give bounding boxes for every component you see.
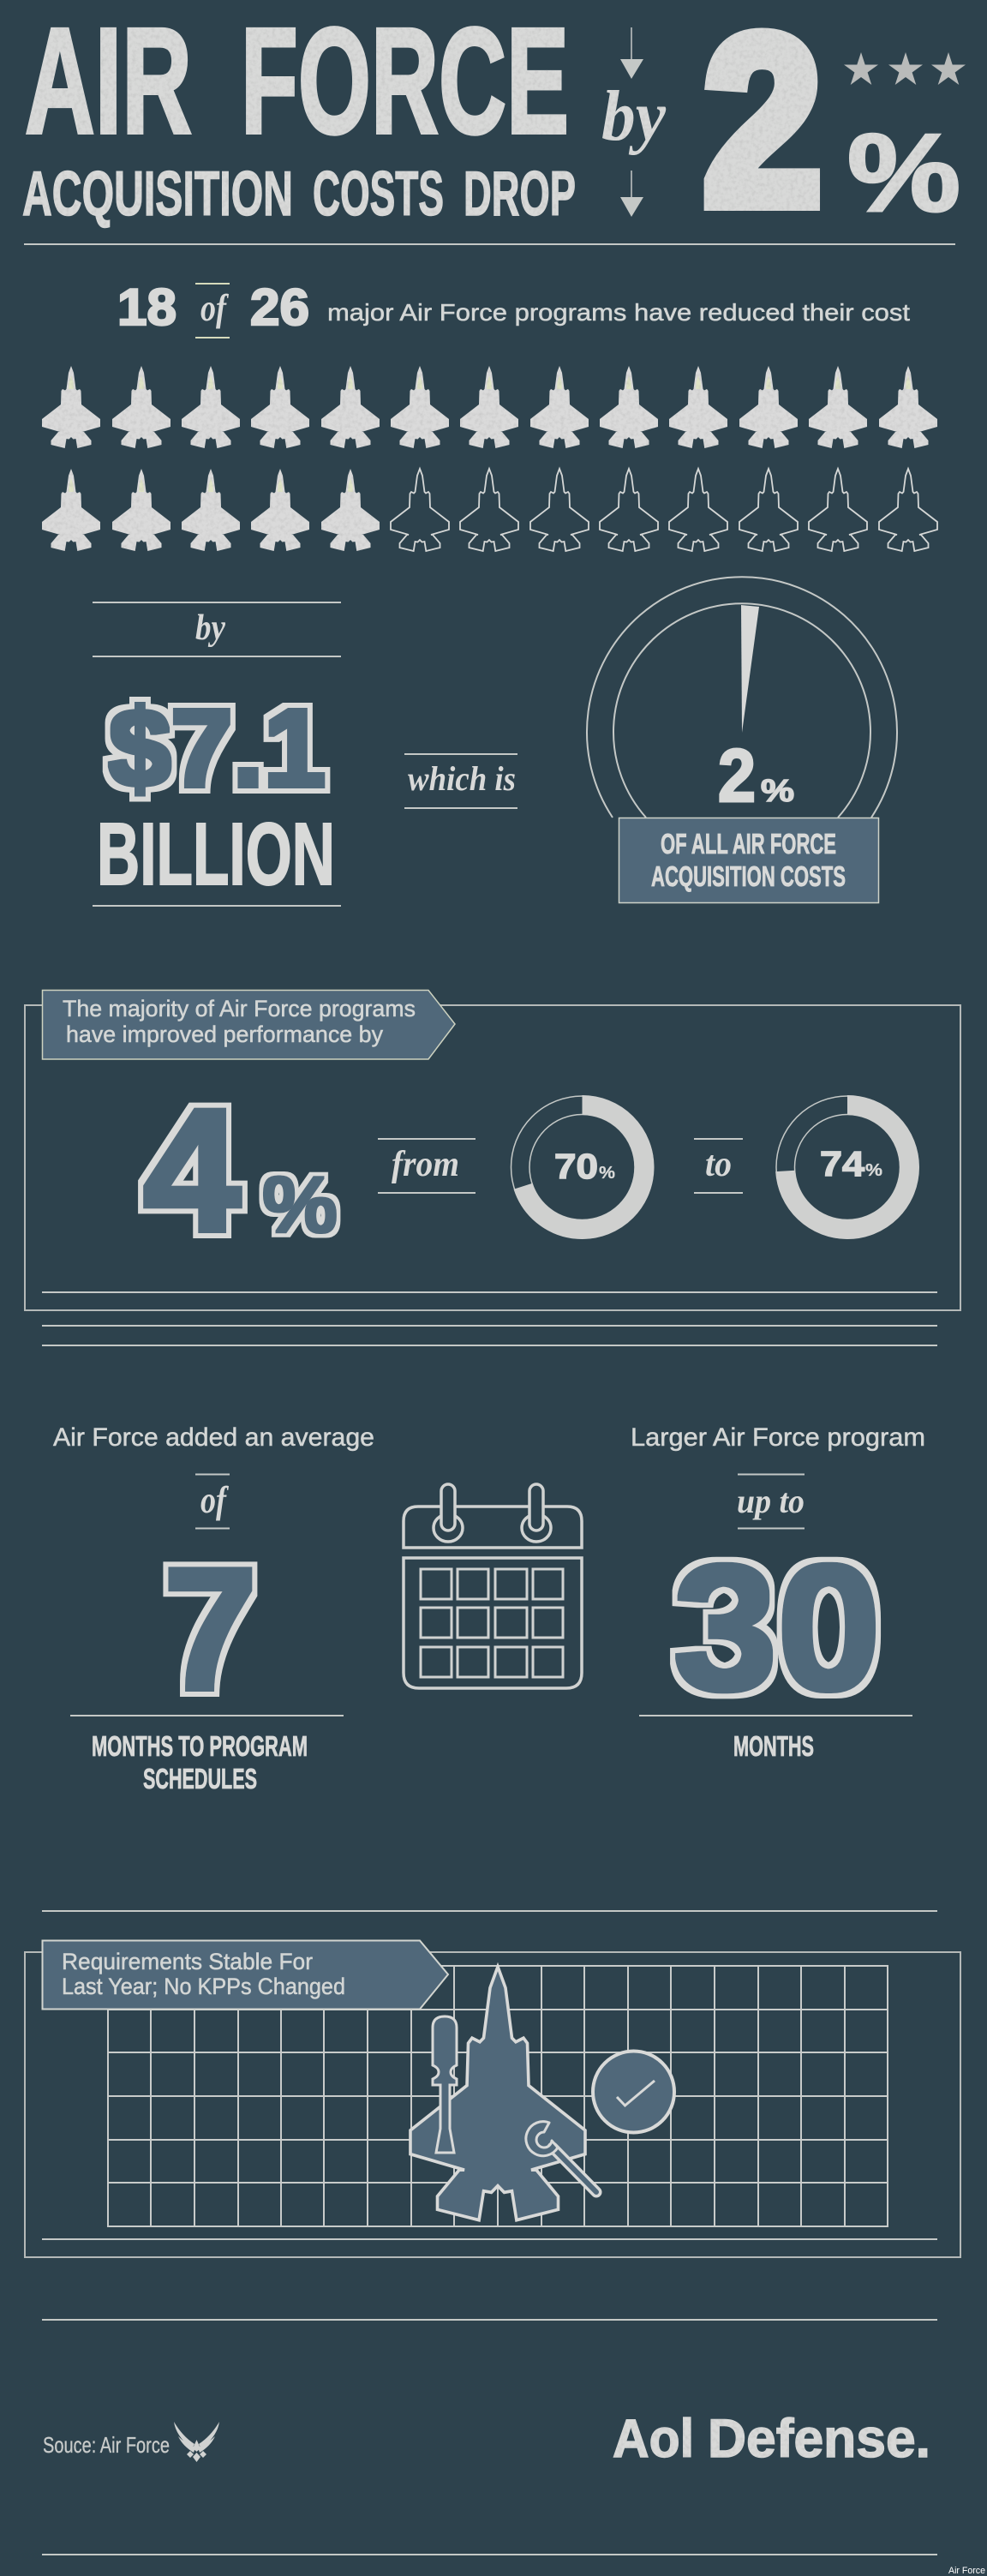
stat: by $7.1 billion	[93, 602, 341, 906]
text: which is	[404, 754, 517, 808]
donut: 74 percent	[776, 1096, 918, 1238]
headline: 18 of 26 programs: major Air Force programs have reduced their cost	[327, 299, 910, 326]
stat: 7: 7	[164, 1532, 257, 1727]
text: from: from	[392, 1145, 459, 1184]
donut: 70 percent	[511, 1096, 653, 1238]
text: source: Souce: Air Force	[43, 2432, 170, 2458]
icon: calendar	[404, 1484, 582, 1688]
title: %	[847, 111, 960, 235]
text: months to program schedules: SCHEDULES	[143, 1763, 257, 1794]
title	[22, 0, 960, 255]
text: Larger Air Force program: Larger Air Force program	[631, 1423, 925, 1452]
text: of: of	[200, 1479, 230, 1521]
logo: Aol Defense: Aol	[613, 2409, 694, 2469]
icon: down arrow top	[620, 27, 643, 79]
callout: requirements stable: Requirements Stable For	[62, 1949, 313, 1974]
text: up to: up to	[737, 1482, 805, 1520]
icon: down arrow bottom	[620, 171, 643, 217]
donut: 70 percent: 70	[554, 1147, 598, 1186]
callout: majority of programs	[43, 991, 455, 1059]
title: COSTS	[313, 159, 444, 229]
photo credit: Air Force	[948, 2566, 985, 2576]
gauge: 2 percent of costs: 2	[718, 734, 756, 818]
gauge: 2 percent of costs: ACQUISITION COSTS	[651, 860, 846, 892]
title divider	[24, 243, 955, 245]
donut: 74 percent: %	[865, 1161, 882, 1180]
icon: three stars	[844, 52, 966, 85]
logo: Aol Defense: Defense.	[708, 2409, 930, 2469]
jets row 1	[42, 366, 937, 448]
title: FORCE	[241, 0, 569, 165]
jets row 2 outlined	[391, 469, 937, 551]
gauge: 2 percent of costs	[587, 577, 897, 903]
text: from	[378, 1139, 476, 1193]
logo: Aol Defense	[613, 2409, 930, 2469]
title: DROP	[464, 159, 576, 229]
icon: screwdriver	[433, 2016, 457, 2153]
callout: majority of programs: have improved performance by	[66, 1021, 383, 1047]
stat: 30: 30	[673, 1529, 881, 1728]
title: AIR	[25, 0, 192, 165]
stat: 4 percent: 4	[143, 1073, 241, 1268]
text: months: MONTHS	[733, 1730, 814, 1762]
icon: large jet	[410, 1967, 585, 2220]
text: to: to	[705, 1145, 732, 1184]
gauge: 2 percent of costs: OF ALL AIR FORCE	[661, 828, 836, 860]
callout: majority of programs: The majority of Air Force programs	[63, 996, 416, 1021]
gauge: 2 percent of costs: %	[761, 773, 794, 808]
stat: 4 percent	[143, 1073, 338, 1268]
chart: grid	[108, 1966, 888, 2226]
stat: by $7.1 billion: by	[195, 608, 225, 648]
icon: wrench	[526, 2122, 596, 2192]
donut: 70 percent: %	[599, 1164, 615, 1183]
stat: by $7.1 billion: BILLION	[97, 805, 335, 903]
text: which is: which is	[408, 759, 516, 798]
text: months to program schedules	[92, 1730, 308, 1794]
title: ACQUISITION	[22, 159, 293, 229]
panel: requirements frame	[25, 1952, 960, 2257]
text: Air Force added an average: Air Force added an average	[53, 1423, 374, 1452]
title: by	[601, 76, 667, 156]
headline: 18 of 26 programs: 26	[250, 279, 309, 336]
headline: 18 of 26 programs	[117, 279, 910, 338]
icon: Air Force wings	[174, 2422, 219, 2462]
jets row 2 filled	[42, 469, 380, 551]
text: to	[694, 1139, 743, 1193]
panel: performance frame	[25, 1005, 960, 1310]
stat: by $7.1 billion: $7.1	[109, 687, 326, 810]
text: up to	[737, 1474, 805, 1529]
icon: check mark badge	[593, 2052, 674, 2132]
headline: 18 of 26 programs: 18	[117, 279, 176, 336]
text: of	[195, 1474, 230, 1529]
text: months to program schedules: MONTHS TO PROGRAM	[92, 1730, 308, 1762]
stat: 4 percent: %	[262, 1160, 338, 1249]
callout: requirements stable: Last Year; No KPPs Changed	[62, 1974, 345, 1999]
donut: 74 percent: 74	[820, 1144, 864, 1183]
callout: requirements stable	[43, 1940, 448, 2009]
headline: 18 of 26 programs: of	[200, 287, 230, 329]
